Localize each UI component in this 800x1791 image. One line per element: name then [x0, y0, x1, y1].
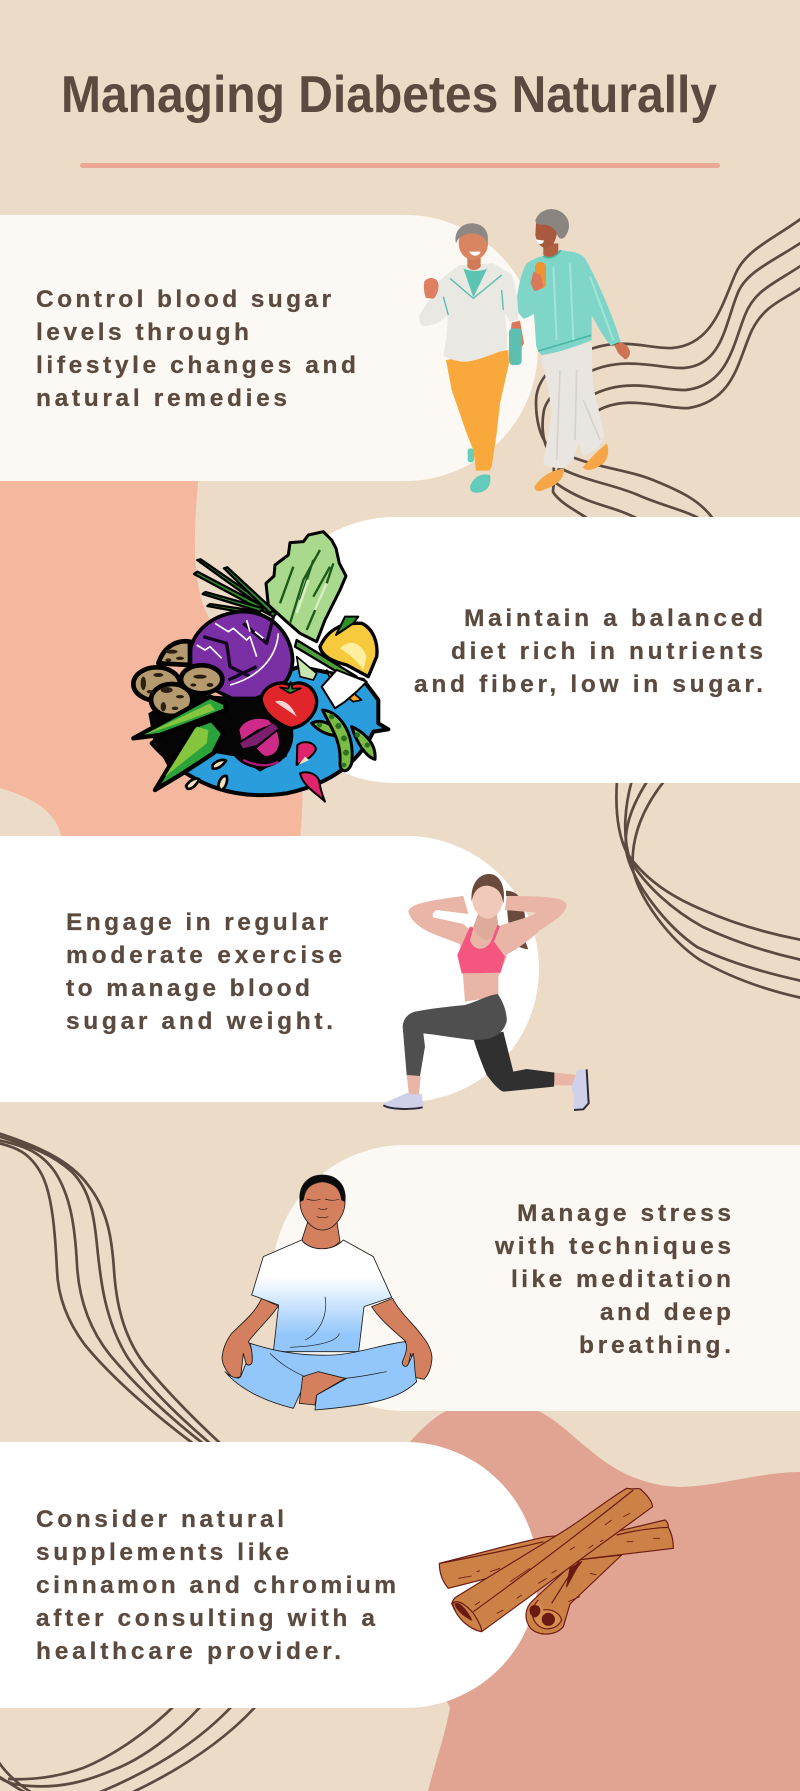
left arm and hand: [222, 1298, 278, 1379]
text block: lifestyle changes and: [36, 352, 356, 379]
bark dashes: [458, 1513, 660, 1613]
lower skin: [407, 1073, 577, 1098]
text block: and fiber, low in sugar.: [414, 671, 763, 698]
text block: like meditation: [511, 1266, 731, 1293]
text block: Consider natural: [36, 1506, 284, 1533]
illustration: vegetables on a plate: [133, 532, 388, 802]
white onion roots: [322, 670, 367, 708]
back leg: [473, 1032, 555, 1092]
text block: sugar and weight.: [66, 1008, 333, 1035]
torso: [460, 925, 507, 1002]
text block: Manage stress: [517, 1200, 731, 1227]
panel background: [0, 1442, 538, 1708]
dark backing: [148, 693, 293, 777]
man bottle and hand: [535, 262, 546, 289]
yellow squash: [320, 623, 377, 677]
text block: [494, 1200, 731, 1359]
potato spots: [141, 650, 213, 711]
woman teal shirt: [463, 268, 487, 297]
woman fist: [424, 278, 439, 299]
beans: [186, 760, 227, 790]
text block: Maintain a balanced: [464, 605, 763, 632]
text block: Control blood sugar: [36, 286, 331, 313]
potatoes: [133, 641, 222, 716]
face details: [307, 1199, 339, 1218]
title: Managing Diabetes Naturally: [61, 66, 717, 124]
panel background: [262, 517, 800, 783]
front leg: [403, 994, 507, 1076]
man sweater: [516, 250, 621, 355]
pepper 2: [155, 720, 223, 790]
illustration: cinnamon sticks: [439, 1488, 673, 1634]
title divider: [80, 163, 720, 168]
onion stalk: [295, 640, 357, 682]
yellow rind: [327, 670, 362, 702]
hair: [300, 1175, 345, 1202]
illustration: woman doing a lunge: [383, 874, 589, 1110]
hair: [471, 874, 504, 903]
panel: balanced diet: [133, 517, 800, 802]
ponytail: [506, 891, 528, 949]
decorative lines: mid right: [616, 780, 800, 998]
text block: [414, 605, 763, 698]
text block: healthcare provider.: [36, 1638, 341, 1665]
pepper 1: [133, 697, 226, 738]
text block: levels through: [36, 319, 249, 346]
panel: natural supplements: [0, 1442, 673, 1708]
head: [300, 1177, 345, 1230]
crossed foot: [299, 1372, 345, 1405]
text block: breathing.: [579, 1332, 731, 1359]
left arm: [408, 896, 470, 944]
text block: after consulting with a: [36, 1605, 375, 1632]
illustration: man meditating: [222, 1175, 432, 1410]
pea pods: [312, 710, 375, 771]
panel: blood sugar control: [0, 209, 630, 493]
woman neck and head: [467, 257, 481, 270]
lettuce: [266, 532, 346, 642]
background blob: dusty pink: [400, 1405, 800, 1791]
man back hand: [614, 342, 630, 359]
woman shoe: [470, 474, 490, 493]
panel background: [0, 836, 539, 1102]
panel: regular exercise: [0, 836, 589, 1110]
text block: diet rich in nutrients: [451, 638, 763, 665]
text block: supplements like: [36, 1539, 289, 1566]
sports bra: [457, 925, 505, 973]
decorative lines: bottom left: [0, 1705, 257, 1791]
plate: [152, 667, 388, 795]
leg crease: [270, 1353, 387, 1378]
neck: [302, 1220, 340, 1249]
woman hand and bottle: [510, 321, 524, 349]
text block: to manage blood: [66, 975, 310, 1002]
right arm and hand: [372, 1298, 432, 1379]
text block: [36, 1506, 396, 1665]
bottom stick: [526, 1555, 622, 1634]
front stick: [452, 1488, 653, 1632]
panel background: [0, 215, 538, 481]
beet: [227, 702, 293, 768]
back stick: [439, 1520, 673, 1588]
panel background: [272, 1145, 800, 1411]
red cabbage: [189, 612, 293, 700]
panel: stress management: [222, 1145, 800, 1411]
green onions: [194, 559, 277, 617]
woman back shoe and pants: [468, 448, 474, 462]
neck and face: [473, 913, 498, 940]
decorative lines: top right: [536, 218, 800, 520]
woman jacket: [419, 263, 518, 362]
text block: and deep: [600, 1299, 731, 1326]
decorative lines: lower left: [0, 1133, 222, 1445]
text block: natural remedies: [36, 385, 287, 412]
text block: with techniques: [494, 1233, 731, 1260]
apple: [261, 683, 317, 728]
man trousers: [541, 342, 604, 468]
man neck and head: [543, 243, 558, 262]
background blob: salmon: [0, 470, 302, 840]
radishes: [297, 742, 316, 765]
t-shirt: [252, 1240, 392, 1352]
shoes: [383, 1093, 423, 1110]
text block: Engage in regular: [66, 909, 328, 936]
illustration: two people walking: [419, 209, 630, 493]
text block: moderate exercise: [66, 942, 342, 969]
right arm: [497, 896, 567, 956]
text block: [66, 909, 342, 1035]
legs: [225, 1342, 417, 1410]
man shoes: [534, 469, 564, 491]
text block: cinnamon and chromium: [36, 1572, 396, 1599]
text block: [36, 286, 356, 412]
